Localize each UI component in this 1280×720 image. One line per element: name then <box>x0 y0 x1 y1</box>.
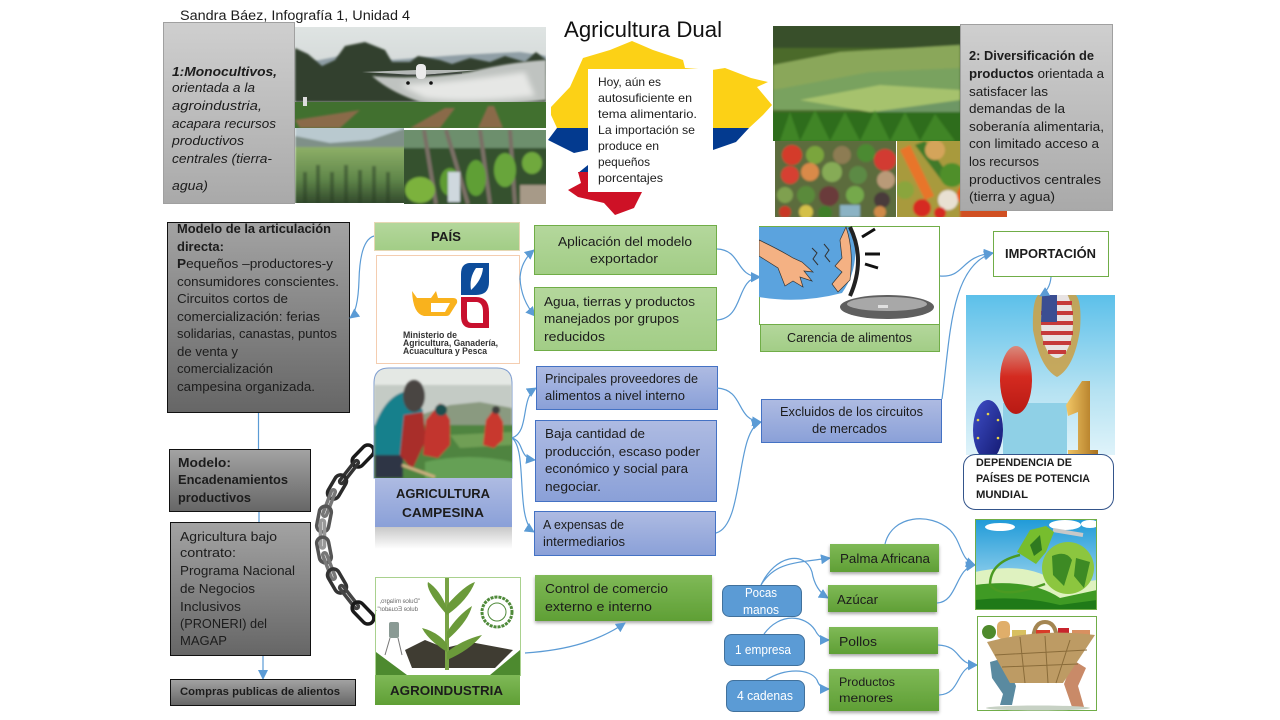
panel: public purchases <box>170 680 356 706</box>
illustration: hungry belly and empty plate <box>759 226 940 324</box>
connector: one company to poultry <box>764 618 829 640</box>
illustration: world power flags <box>966 286 1115 460</box>
title: Agricultura Dual <box>564 17 722 42</box>
box: export model: Aplicación del modelo <box>558 234 692 249</box>
panel: diversificacion: soberanía alimentaria, <box>969 119 1104 134</box>
box: minor products: menores <box>839 691 893 705</box>
logo: Ministerio de Agricultura: Ministerio de <box>403 330 457 340</box>
panel: Agricultura Campesina label <box>375 478 512 527</box>
box: sugar <box>828 585 937 612</box>
panel: diversificacion: con limitado acceso a <box>969 136 1100 151</box>
panel: direct articulation model: comercialización: ferias <box>177 309 321 324</box>
callout: food self-sufficiency: produce en <box>598 139 659 153</box>
map: Ecuador shape with flag colours <box>548 41 772 215</box>
callout: food self-sufficiency: autosuficiente en <box>598 91 692 105</box>
badge: few hands <box>722 586 802 617</box>
photo: sugar cane field <box>295 126 406 205</box>
author credit: Sandra Báez, Infografía 1, Unidad 4 <box>180 8 411 23</box>
panel: direct articulation model: Pequeños –productores-y <box>177 256 334 271</box>
icon: metal chain <box>316 442 376 627</box>
box: poultry <box>829 627 938 654</box>
panel: monocultivos: centrales (tierra- <box>172 151 273 166</box>
connector: suppliers to excluded <box>717 388 761 422</box>
panel: productive chains model: productivos <box>178 491 251 505</box>
panel: Agricultura Campesina label: AGRICULTURA <box>396 486 491 501</box>
box: middlemen: A expensas de <box>543 517 624 532</box>
box: water, land and products: Agua, tierras y productos <box>544 294 696 309</box>
connector: campesina to low production <box>512 438 535 460</box>
connector: sugar to biofuel <box>937 565 975 603</box>
panel: PAIS heading <box>374 222 520 250</box>
connector: reduced groups to food shortage <box>717 277 760 320</box>
badge: one company: 1 empresa <box>735 643 791 657</box>
panel: direct articulation model: consumidores conscientes. <box>177 274 339 289</box>
box: main food suppliers <box>536 366 718 410</box>
connector: four chains to minor products <box>766 671 829 689</box>
box: middlemen <box>534 512 716 556</box>
callout: food self-sufficiency: pequeños <box>598 155 650 169</box>
connector: PAIS to direct model <box>350 236 374 318</box>
box: export model: exportador <box>590 251 659 266</box>
panel: diversificacion <box>960 24 1112 210</box>
callout: dependence on world powers: PAÍSES DE POTENCIA <box>976 472 1090 485</box>
panel: contract farming: Programa Nacional <box>180 563 295 578</box>
panel: contract farming: de Negocios <box>180 581 256 596</box>
panel: contract farming <box>170 522 310 656</box>
callout: food self-sufficiency: Hoy, aún es <box>598 75 661 89</box>
box: excluded from markets <box>762 400 942 442</box>
panel: productive chains model <box>170 450 310 512</box>
panel: contract farming: Agricultura bajo <box>180 529 277 544</box>
photo: vegetable market stall <box>773 139 898 220</box>
panel: direct articulation model <box>168 221 350 412</box>
connector: minor products to basket <box>939 665 977 695</box>
callout: food self-sufficiency: La importación se <box>598 123 695 137</box>
panel: diversificacion: satisfacer las <box>969 84 1049 99</box>
illustration: agroindustry sugar cane <box>376 578 520 676</box>
box: excluded from markets: de mercados <box>812 421 887 436</box>
panel: monocultivos: productivos <box>171 133 245 148</box>
connector: logo to water and land box <box>520 278 535 316</box>
connector: excluded to importation <box>942 253 993 399</box>
connector: left column vertical links <box>258 413 263 679</box>
panel: monocultivos: acapara recursos <box>172 116 277 131</box>
box: water, land and products: manejados por grupos <box>544 311 680 326</box>
illustration: agroindustry sugar cane: "Dulce milagro, <box>379 599 420 605</box>
box: low production <box>536 420 716 502</box>
box: low production: producción, escaso poder <box>545 444 701 459</box>
badge: few hands: Pocas <box>745 586 777 600</box>
panel: contract farming: contrato: <box>180 545 236 560</box>
panel: contract farming: Inclusivos <box>180 599 242 614</box>
panel: direct articulation model: Modelo de la articulación <box>177 221 331 236</box>
panel: diversificacion: (tierra y agua) <box>969 189 1055 204</box>
connector: green boxes to food shortage <box>717 249 760 277</box>
panel: direct articulation model: solidarias, canastas, puntos <box>177 326 337 341</box>
panel: diversificacion: demandas de la <box>969 101 1066 116</box>
connector: palm oil to biofuel <box>885 519 975 565</box>
photo: banana plantation <box>402 128 548 206</box>
panel: contract farming: (PRONERI) del <box>180 616 267 631</box>
connector: agroindustry to trade control <box>525 623 625 653</box>
photo: peasant farmers working the land <box>374 368 514 480</box>
panel: monocultivos <box>164 22 294 204</box>
box: minor products <box>829 669 939 711</box>
connector: poultry to basket <box>938 645 977 665</box>
panel: direct articulation model: directa: <box>177 239 224 254</box>
panel: public purchases: Compras publicas de alientos <box>180 686 340 698</box>
connector: middlemen to excluded <box>716 422 761 533</box>
box: export model <box>534 226 716 274</box>
panel: contract farming: MAGAP <box>180 633 227 648</box>
badge: four chains <box>726 680 804 712</box>
box: trade control <box>535 575 712 621</box>
connector: shortage to importation <box>940 253 993 276</box>
box: food shortage <box>760 324 940 352</box>
connector: importation to dependence <box>1040 277 1051 296</box>
box: food shortage: Carencia de alimentos <box>787 330 912 345</box>
box: trade control: externo e interno <box>545 599 652 614</box>
panel: monocultivos: 1:Monocultivos, <box>172 64 277 79</box>
box: importation <box>994 232 1108 276</box>
box: low production: negociar. <box>545 479 601 494</box>
box: main food suppliers: Principales proveedores de <box>545 371 698 386</box>
panel: diversificacion: los recursos <box>969 154 1039 169</box>
panel: direct articulation model: de venta y <box>177 344 238 359</box>
illustration: agroindustry sugar cane: dulce Ecuador". <box>376 607 418 613</box>
box: low production: Baja cantidad de <box>545 426 645 441</box>
panel: direct articulation model: campesina organizada. <box>177 379 315 394</box>
panel: PAIS heading: PAÍS <box>431 229 461 244</box>
panel: Agroindustria label <box>375 675 520 705</box>
box: excluded from markets: Excluidos de los circuitos <box>780 404 923 419</box>
connector: campesina to middlemen <box>512 438 534 532</box>
badge: few hands: manos <box>743 603 779 617</box>
box: main food suppliers: alimentos a nivel interno <box>545 388 685 403</box>
box: importation: IMPORTACIÓN <box>1005 246 1096 261</box>
panel: diversificacion: 2: Diversificación de <box>969 48 1094 63</box>
photo: terraced small-plot fields <box>771 24 965 143</box>
box: middlemen: intermediarios <box>543 534 625 549</box>
badge: one company <box>724 634 804 666</box>
panel: diversificacion: productivos centrales <box>969 172 1102 187</box>
box: poultry: Pollos <box>839 634 878 649</box>
photo: crop-duster airplane spraying field <box>295 27 546 128</box>
box: African palm <box>830 544 939 572</box>
panel: productive chains model: Encadenamientos <box>178 473 288 487</box>
photo reflection <box>375 527 512 549</box>
logo: Ministerio de Agricultura: Agricultura, Ganadería, <box>403 338 498 348</box>
panel: direct articulation model: Circuitos cortos de <box>177 291 288 306</box>
panel: productive chains model: Modelo: <box>178 456 231 470</box>
illustration: people carrying food basket <box>978 616 1096 710</box>
connector: few hands to palm oil <box>761 558 830 585</box>
panel: monocultivos: agroindustria, <box>172 98 262 113</box>
box: low production: económico y social para <box>545 461 689 476</box>
panel: direct articulation model: comercialización <box>177 361 273 376</box>
box: water, land and products <box>534 288 716 350</box>
callout: dependence on world powers <box>964 454 1114 510</box>
illustration: biofuel nozzle and green globe <box>975 519 1099 610</box>
box: minor products: Productos <box>839 675 895 689</box>
box: trade control: Control de comercio <box>545 581 668 596</box>
box: water, land and products: reducidos <box>544 329 606 344</box>
connector: few hands to sugar <box>761 558 828 598</box>
callout: food self-sufficiency: porcentajes <box>598 171 663 185</box>
callout: dependence on world powers: MUNDIAL <box>976 489 1028 501</box>
logo: Ministerio de Agricultura: Acuacultura y Pesca <box>403 346 488 356</box>
panel: Agricultura Campesina label: CAMPESINA <box>402 505 485 520</box>
callout: food self-sufficiency <box>588 69 713 192</box>
callout: dependence on world powers: DEPENDENCIA DE <box>976 457 1072 469</box>
logo: Ministerio de Agricultura <box>376 256 520 364</box>
panel: Agroindustria label: AGROINDUSTRIA <box>390 683 504 698</box>
photo: assorted fresh vegetables <box>895 139 1009 219</box>
box: sugar: Azúcar <box>837 592 879 607</box>
panel: diversificacion: productos orientada a <box>969 66 1105 81</box>
callout: food self-sufficiency: tema alimentario. <box>598 107 697 121</box>
connector: campesina to suppliers <box>512 388 536 438</box>
badge: four chains: 4 cadenas <box>737 689 793 703</box>
connector: logo to green boxes <box>520 250 534 280</box>
panel: monocultivos: agua) <box>172 178 208 193</box>
box: African palm: Palma Africana <box>840 551 931 566</box>
panel: monocultivos: orientada a la <box>172 80 255 95</box>
